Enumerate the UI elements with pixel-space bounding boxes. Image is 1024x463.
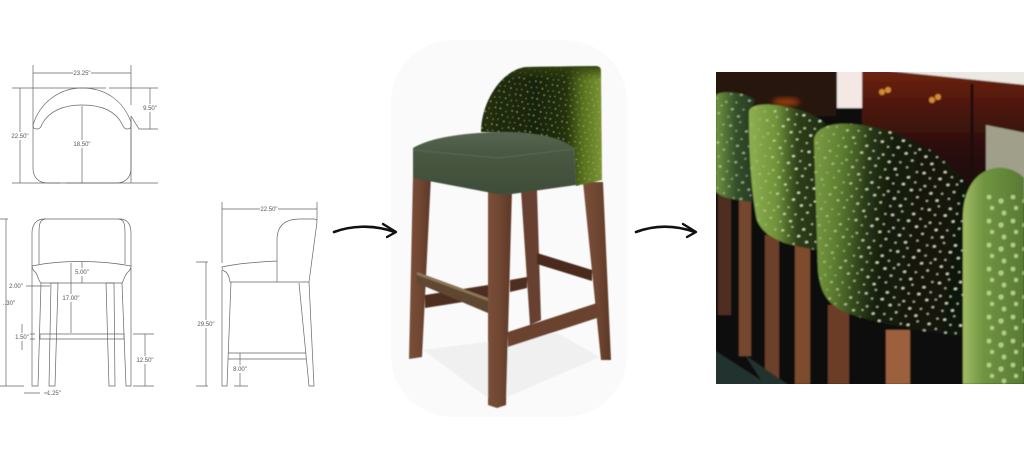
front view labels: 2.00": [9, 284, 23, 290]
stool 1: [716, 88, 756, 204]
leather seat: [413, 132, 576, 195]
panel: product background: [391, 40, 627, 417]
front view labels: 5.00": [75, 270, 89, 276]
floor: [714, 350, 790, 386]
top view labels: 9.50": [143, 106, 157, 112]
top view labels: 18.50": [73, 142, 91, 148]
photo: installed stools: [716, 72, 1024, 384]
bar stool product: [409, 66, 611, 408]
top view labels: 23.25": [73, 71, 91, 77]
bright window: [837, 70, 862, 108]
right leg: [583, 182, 611, 360]
technical drawing: front view: [0, 219, 154, 393]
front view labels: [3, 268, 154, 397]
upholstered back: [481, 66, 602, 186]
top view labels: 22.50": [11, 134, 29, 140]
front view labels: 12.50": [136, 358, 154, 364]
side view labels: 22.50": [260, 207, 278, 213]
stool 3: [812, 120, 968, 340]
front view labels: 1.25": [47, 391, 61, 397]
patterned panel: [986, 125, 1024, 200]
floor shadow: [423, 333, 600, 398]
warm glow: [772, 98, 800, 106]
side view labels: 29.50": [197, 322, 215, 328]
stool 2: [748, 100, 828, 252]
front stretcher: [508, 303, 600, 347]
left leg: [409, 176, 431, 359]
back legs and rear stretchers: [521, 190, 541, 325]
brass handles: [879, 87, 941, 103]
arrow: product to photo: [636, 224, 696, 237]
technical drawing: side view: [196, 202, 317, 386]
front leg: [488, 190, 512, 408]
stool 4: [962, 165, 1024, 385]
photo background: [714, 70, 1024, 386]
front view labels: 17.00": [62, 296, 80, 302]
side view labels: [197, 205, 278, 373]
top view labels: [11, 69, 158, 148]
technical drawing: top view: [12, 65, 158, 183]
front view labels: ..30": [3, 301, 15, 307]
front view labels: 1.50": [15, 335, 29, 341]
brass foot rest: [417, 272, 488, 313]
wood cabinet: [862, 70, 1024, 210]
wood legs: [718, 195, 910, 384]
side view labels: 8.00": [233, 367, 247, 373]
arrow: drawing to product: [334, 224, 396, 237]
